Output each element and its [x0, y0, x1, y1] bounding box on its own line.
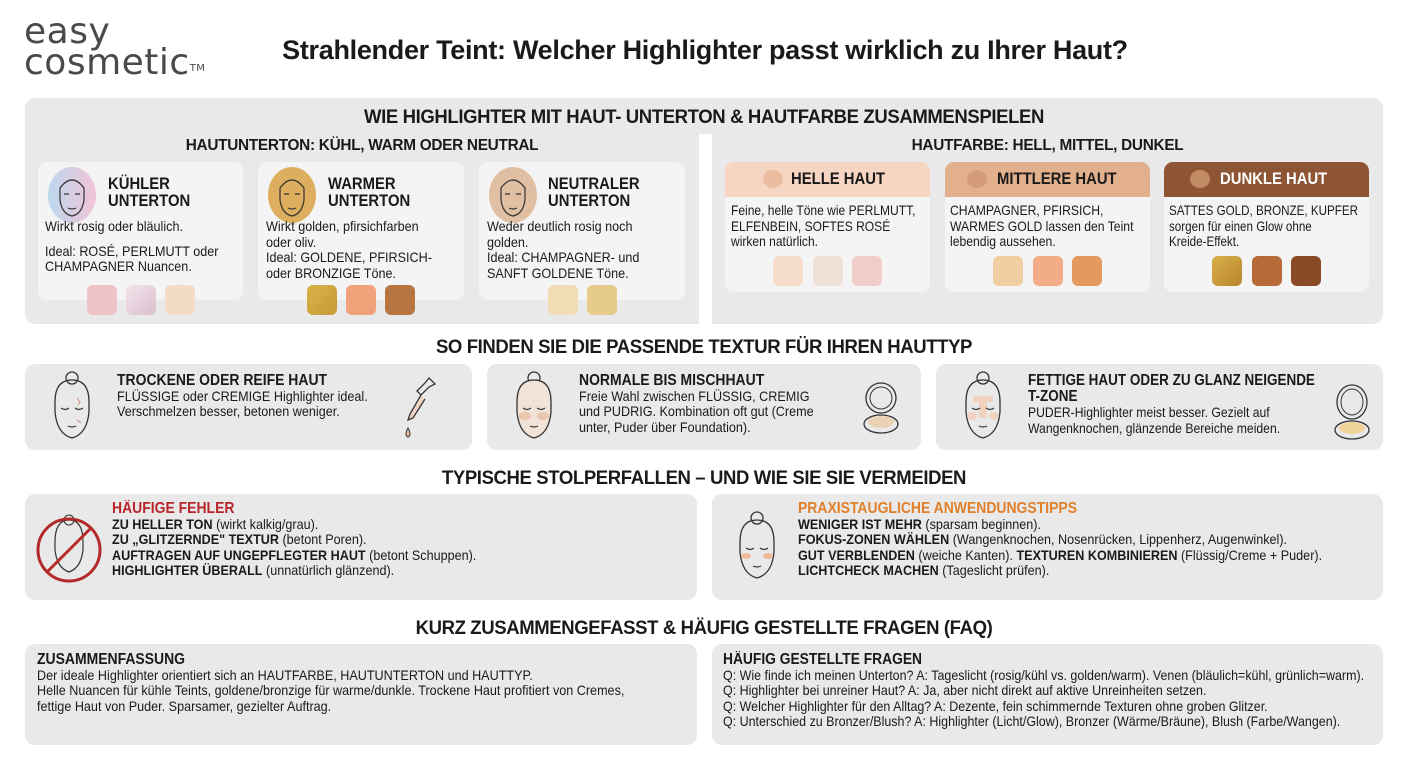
panel: oily skin: FETTIGE HAUT ODER ZU GLANZ NEIGENDE: [1028, 372, 1315, 389]
panel: common mistakes: HÄUFIGE FEHLER: [112, 500, 234, 517]
panel: dry skin: Verschmelzen besser, betonen weniger.: [117, 403, 340, 419]
swatches: warm: [307, 285, 415, 315]
card: dark skin: Kreide-Effekt.: [1169, 233, 1239, 249]
panel: common mistakes: ZU „GLITZERNDE" TEXTUR (betont Poren).: [112, 531, 367, 547]
panel: tips: [712, 494, 1383, 600]
divider: [699, 134, 712, 324]
panel: FAQ: Q: Wie finde ich meinen Unterton? A: Tageslicht (rosig/kühl vs. golden/warm). Venen (bläulich=kühl, grünlich=warm).: [723, 666, 1364, 682]
panel: common mistakes: ZU HELLER TON (wirkt kalkig/grau).: [112, 516, 318, 532]
panel: common mistakes: HIGHLIGHTER ÜBERALL (unnatürlich glänzend).: [112, 562, 394, 578]
heading: WIE HIGHLIGHTER MIT HAUT- UNTERTON & HAUTFARBE ZUSAMMENSPIELEN: [364, 106, 1044, 128]
header band: DUNKLE HAUT: [1220, 170, 1327, 188]
card: neutral undertone: SANFT GOLDENE Töne.: [487, 264, 629, 280]
card: neutral undertone: golden.: [487, 234, 528, 250]
card: warm undertone: oder BRONZIGE Töne.: [266, 264, 396, 280]
card: light skin: wirken natürlich.: [731, 233, 818, 249]
icon: face: [965, 371, 1001, 439]
card: neutral undertone: Ideal: CHAMPAGNER- und: [487, 249, 639, 265]
panel: normal skin: unter, Puder über Foundation).: [579, 418, 751, 434]
card: medium skin: CHAMPAGNER, PFIRSICH,: [950, 202, 1103, 218]
card: light skin: ELFENBEIN, SOFTES ROSÉ: [731, 218, 890, 234]
card: dark skin: sorgen für einen Glow ohne: [1169, 218, 1312, 234]
panel: FAQ: HÄUFIG GESTELLTE FRAGEN: [723, 651, 922, 668]
panel: dry skin: TROCKENE ODER REIFE HAUT: [117, 372, 327, 389]
card: cool undertone: KÜHLER: [108, 175, 170, 193]
icon: face: [54, 371, 90, 439]
logo: [24, 11, 205, 83]
panel: normal skin: Freie Wahl zwischen FLÜSSIG, CREMIG: [579, 388, 810, 404]
card: neutral undertone: UNTERTON: [548, 192, 630, 210]
card: warm undertone: WARMER: [328, 175, 396, 193]
panel: summary: Helle Nuancen für kühle Teints, goldene/bronzige für warme/dunkle. Trockene Haut profitiert von Cremes,: [37, 682, 624, 698]
panel: oily skin: [936, 364, 1383, 450]
icon: face with highlight zones: [739, 511, 775, 579]
card: cool undertone: Wirkt rosig oder bläulich.: [45, 218, 183, 234]
panel: summary: ZUSAMMENFASSUNG: [37, 651, 185, 668]
header band: [945, 162, 1150, 197]
card: warm undertone: Ideal: GOLDENE, PFIRSICH-: [266, 249, 432, 265]
card: dark skin: [1164, 162, 1369, 292]
panel: normal skin: NORMALE BIS MISCHHAUT: [579, 372, 764, 389]
panel: FAQ: Q: Welcher Highlighter für den Alltag? A: Dezente, fein schimmernde Texturen ohne groben Glitzer.: [723, 698, 1268, 714]
card: warm undertone: Wirkt golden, pfirsichfarben: [266, 218, 419, 234]
card: medium skin: WARMES GOLD lassen den Teint: [950, 218, 1133, 234]
header band: HELLE HAUT: [791, 170, 885, 188]
icon: face: [516, 371, 552, 439]
icon: cool face: [48, 167, 96, 223]
swatches: cool: [87, 285, 195, 315]
panel: common mistakes: AUFTRAGEN AUF UNGEPFLEGTER HAUT (betont Schuppen).: [112, 546, 476, 562]
card: warm undertone: oder oliv.: [266, 234, 316, 250]
card: cool undertone: CHAMPAGNER Nuancen.: [45, 258, 192, 274]
card: medium skin: lebendig aussehen.: [950, 233, 1056, 249]
panel: summary: Der ideale Highlighter orientiert sich an HAUTFARBE, HAUTUNTERTON und HAUTTYP.: [37, 666, 533, 682]
panel: dry skin: FLÜSSIGE oder CREMIGE Highlighter ideal.: [117, 388, 368, 404]
card: neutral undertone: NEUTRALER: [548, 175, 640, 193]
panel: FAQ: Q: Unterschied zu Bronzer/Blush? A: Highlighter (Licht/Glow), Bronzer (Wärme/Bräune), Blush (Farbe/Wangen).: [723, 713, 1340, 729]
card: cool undertone: [38, 162, 243, 300]
panel: undertone and skin color: [25, 98, 1383, 324]
panel: tips: WENIGER IST MEHR (sparsam beginnen).: [798, 516, 1041, 532]
icon: dropper: [406, 377, 436, 438]
swatches: neutral: [548, 285, 617, 315]
card: light skin: [725, 162, 930, 292]
card: neutral undertone: [479, 162, 685, 300]
panel: oily skin: T-ZONE: [1028, 388, 1077, 405]
panel: summary: [25, 644, 697, 745]
panel: normal skin: und PUDRIG. Kombination oft gut (Creme: [579, 403, 814, 419]
panel: tips: PRAXISTAUGLICHE ANWENDUNGSTIPPS: [798, 500, 1077, 517]
heading: texture: SO FINDEN SIE DIE PASSENDE TEXTUR FÜR IHREN HAUTTYP: [436, 336, 972, 358]
card: neutral undertone: Weder deutlich rosig noch: [487, 218, 632, 234]
icon: neutral face: [489, 167, 537, 223]
icon: compact: [863, 382, 899, 434]
panel: tips: GUT VERBLENDEN (weiche Kanten). TEXTUREN KOMBINIEREN (Flüssig/Creme + Puder).: [798, 546, 1322, 562]
header band: [725, 162, 930, 197]
card: cool undertone: Ideal: ROSÉ, PERLMUTT oder: [45, 242, 218, 258]
icon: warm face: [268, 167, 316, 223]
panel: FAQ: [712, 644, 1383, 745]
panel: common mistakes: [25, 494, 697, 600]
heading: pitfalls: TYPISCHE STOLPERFALLEN – UND WIE SIE SIE VERMEIDEN: [442, 467, 966, 489]
panel: oily skin: PUDER-Highlighter meist besser. Gezielt auf: [1028, 404, 1270, 420]
card: warm undertone: UNTERTON: [328, 192, 410, 210]
subheading: undertone: HAUTUNTERTON: KÜHL, WARM ODER NEUTRAL: [186, 137, 538, 154]
panel: normal skin: [487, 364, 921, 450]
panel: oily skin: Wangenknochen, glänzende Bereiche meiden.: [1028, 420, 1280, 436]
panel: tips: LICHTCHECK MACHEN (Tageslicht prüfen).: [798, 562, 1049, 578]
card: cool undertone: UNTERTON: [108, 192, 190, 210]
logo: easy: [24, 11, 110, 52]
heading: summary & FAQ: KURZ ZUSAMMENGEFASST & HÄUFIG GESTELLTE FRAGEN (FAQ): [416, 617, 992, 639]
logo: cosmeticTM: [24, 42, 205, 83]
header band: MITTLERE HAUT: [997, 170, 1117, 188]
card: warm undertone: [258, 162, 464, 300]
panel: FAQ: Q: Highlighter bei unreiner Haut? A: Ja, aber nicht direkt auf aktive Unreinheiten setzen.: [723, 682, 1206, 698]
icon: compact: [1334, 384, 1370, 440]
header band: [1164, 162, 1369, 197]
card: dark skin: SATTES GOLD, BRONZE, KUPFER: [1169, 202, 1358, 218]
icon: crossed face: [36, 514, 102, 582]
card: medium skin: [945, 162, 1150, 292]
panel: tips: FOKUS-ZONEN WÄHLEN (Wangenknochen, Nosenrücken, Lippenherz, Augenwinkel).: [798, 531, 1287, 547]
subheading: skin color: HAUTFARBE: HELL, MITTEL, DUNKEL: [912, 137, 1183, 154]
title: Strahlender Teint: Welcher Highlighter passt wirklich zu Ihrer Haut?: [282, 35, 1128, 65]
card: light skin: Feine, helle Töne wie PERLMUTT,: [731, 202, 915, 218]
panel: summary: fettige Haut von Puder. Sparsamer, gezielter Auftrag.: [37, 698, 331, 714]
panel: dry skin: [25, 364, 472, 450]
